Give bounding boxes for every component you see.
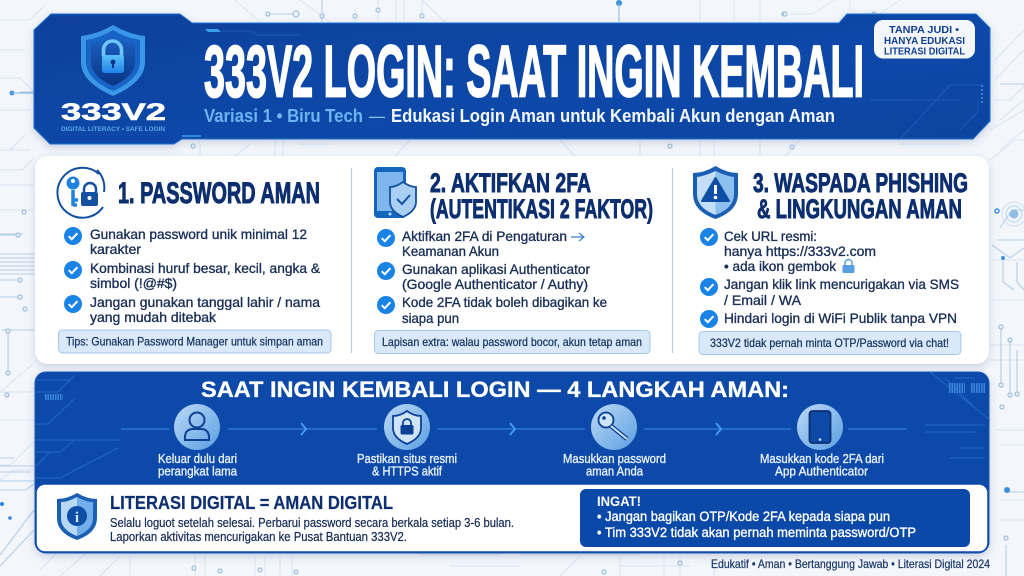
- callout: ingat: INGAT!: [597, 493, 641, 509]
- step label: Masukkan password: [563, 451, 666, 466]
- literacy text: [110, 515, 514, 544]
- icon: logo shield with padlock: [81, 25, 145, 96]
- section 2: aktifkan 2fa: [374, 167, 653, 354]
- logo tagline: DIGITAL LITERACY • SAFE LOGIN: [61, 126, 165, 133]
- step 3: aman Anda: [586, 464, 644, 478]
- step 4: App Authenticator: [775, 464, 869, 478]
- icon: key and padlock: [57, 168, 104, 218]
- heading: (AUTENTIKASI 2 FAKTOR): [430, 194, 653, 224]
- tip box: [699, 332, 961, 354]
- icon: phone with shield: [374, 167, 416, 218]
- bullet: kombinasi: [64, 260, 321, 291]
- bullet: authenticator: (Google Authenticator / Authy): [402, 276, 588, 292]
- bullet: cek url: • ada ikon gembok: [724, 258, 837, 274]
- footer note: Edukatif • Aman • Bertanggung Jawab • Literasi Digital 2024: [711, 557, 990, 571]
- step 2: & HTTPS aktif: [372, 464, 442, 478]
- subtitle: —: [369, 106, 385, 126]
- icon: key: [591, 404, 637, 450]
- section 1: password aman: [57, 168, 331, 353]
- bullet: authenticator: Gunakan aplikasi Authenticator: [402, 261, 590, 277]
- tip box: [374, 330, 650, 354]
- literacy heading: LITERASI DIGITAL = AMAN DIGITAL: [110, 493, 393, 513]
- flow connector arrows: [121, 423, 907, 435]
- bullet: tanggal lahir: [64, 294, 320, 325]
- heading: 1. PASSWORD AMAN: [118, 177, 320, 210]
- badge: tanpa judi: TANPA JUDI •: [889, 24, 959, 36]
- callout: ingat: • Tim 333V2 tidak akan pernah meminta password/OTP: [597, 525, 916, 540]
- bullet: password unik: [64, 226, 307, 257]
- bullet: cek url: [700, 228, 876, 274]
- header banner: [34, 14, 990, 144]
- bullet: pengaturan: Keamanan Akun: [402, 243, 499, 259]
- subtitle: Edukasi Login Aman untuk Kembali Akun dengan Aman: [391, 106, 835, 126]
- tip box: 333V2 tidak pernah minta OTP/Password via chat!: [710, 336, 949, 350]
- bullet: cek url: Cek URL resmi:: [724, 228, 817, 244]
- subtitle: [204, 106, 835, 126]
- step 1: perangkat lama: [158, 464, 238, 478]
- literacy strip: [36, 484, 988, 552]
- bullet: link mencurigakan: Jangan klik link mencurigakan via SMS: [724, 276, 959, 292]
- subtitle: Variasi 1 • Biru Tech: [204, 106, 363, 126]
- heading: [430, 168, 653, 224]
- step 1: [158, 404, 238, 478]
- section 3: waspada phishing: [693, 166, 968, 354]
- step 3: [563, 404, 666, 478]
- callout: ingat: • Jangan bagikan OTP/Kode 2FA kepada siapa pun: [597, 509, 890, 524]
- icon: warning shield: [693, 166, 738, 219]
- step label: Masukkan kode 2FA dari: [760, 451, 884, 466]
- step 4: [760, 404, 884, 478]
- badge: tanpa judi: [874, 20, 975, 58]
- tip box: Lapisan extra: walau password bocor, akun tetap aman: [382, 335, 642, 349]
- bullet: link mencurigakan: [700, 276, 959, 308]
- bullet: kode 2fa: siapa pun: [402, 310, 459, 326]
- bullet: link mencurigakan: / Email / WA: [724, 292, 802, 308]
- icon: shield with lock: [384, 404, 430, 450]
- tip box: Tips: Gunakan Password Manager untuk simpan aman: [66, 334, 323, 348]
- heading: [753, 168, 968, 224]
- bullet: password unik: karakter: [90, 241, 141, 257]
- heading: SAAT INGIN KEMBALI LOGIN — 4 LANGKAH AMAN:: [201, 377, 789, 402]
- callout: ingat: [580, 489, 970, 547]
- bullet: kombinasi: simbol (!@#$): [90, 275, 177, 291]
- bullet: tanggal lahir: yang mudah ditebak: [90, 309, 217, 325]
- literacy text: Laporkan aktivitas mencurigakan ke Pusat Bantuan 333V2.: [110, 529, 407, 544]
- panel: 4 langkah aman: [35, 372, 990, 553]
- bullet: kombinasi: Kombinasi huruf besar, kecil, angka &: [90, 260, 321, 276]
- bullet: cek url: hanya https://333v2.com: [724, 243, 876, 259]
- step label: Keluar dulu dari: [158, 451, 237, 466]
- panel: three tips card: [35, 156, 989, 364]
- bullet: pengaturan: Aktifkan 2FA di Pengaturan: [402, 228, 567, 244]
- icon: info shield: [57, 493, 97, 540]
- bullet: kode 2fa: Kode 2FA tidak boleh dibagikan ke: [402, 294, 607, 310]
- logo shield and wordmark: [61, 25, 166, 133]
- icon: info shield: i: [75, 510, 79, 526]
- tip box: [58, 330, 331, 353]
- icon: user: [174, 404, 220, 450]
- badge: tanpa judi: LITERASI DIGITAL: [884, 46, 966, 58]
- step 2: [357, 404, 457, 478]
- bullet: pengaturan: [377, 228, 584, 259]
- bullet: authenticator: [377, 261, 590, 292]
- bullet: wifi publik: Hindari login di WiFi Publik tanpa VPN: [724, 310, 957, 326]
- logo wordmark: 333V2: [61, 99, 166, 126]
- badge: tanpa judi: HANYA EDUKASI: [884, 35, 965, 47]
- bullet: password unik: Gunakan password unik minimal 12: [90, 226, 307, 242]
- bullet: tanggal lahir: Jangan gunakan tanggal lahir / nama: [90, 294, 320, 310]
- bullet: kode 2fa: [377, 294, 607, 326]
- step label: Pastikan situs resmi: [357, 451, 457, 466]
- icon: smartphone: [797, 404, 843, 450]
- heading: 2. AKTIFKAN 2FA: [430, 168, 591, 198]
- literacy text: Selalu loguot setelah selesai. Perbarui password secara berkala setiap 3-6 bulan.: [110, 515, 514, 530]
